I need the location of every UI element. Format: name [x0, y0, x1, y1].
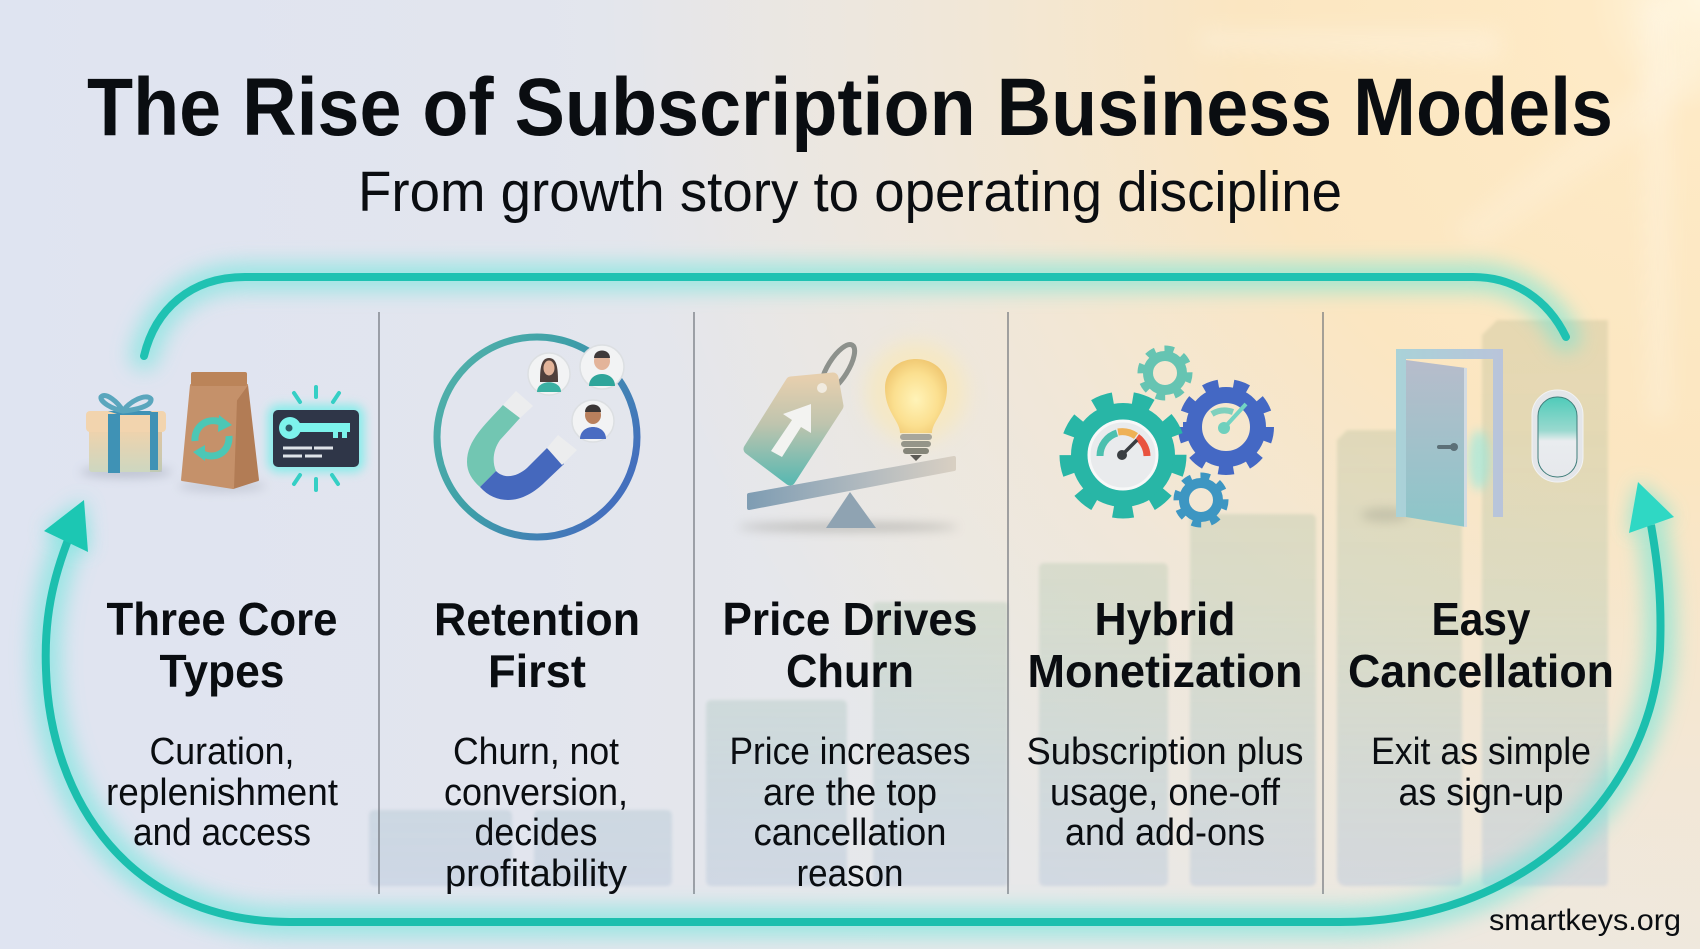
- text: price drives churn: cancellation: [754, 812, 946, 854]
- text: three core types: replenishment: [106, 772, 338, 814]
- icon: open door: [1361, 349, 1503, 527]
- heading: three core types: Types: [160, 645, 284, 697]
- icon: gift box: [80, 396, 172, 478]
- panel: price drives churn: [722, 340, 978, 895]
- source credit: smartkeys.org: [1489, 904, 1681, 937]
- text: retention first: [444, 731, 628, 895]
- text: easy cancellation: Exit as simple: [1371, 731, 1591, 773]
- text: retention first: Churn, not: [453, 731, 619, 773]
- text: hybrid monetization: [1026, 731, 1304, 854]
- panel: easy cancellation: [1348, 349, 1614, 814]
- text: price drives churn: are the top: [763, 772, 937, 814]
- heading: price drives churn: Price Drives: [722, 593, 978, 645]
- heading: easy cancellation: [1348, 593, 1614, 697]
- text: three core types: and access: [133, 812, 311, 854]
- panel: hybrid monetization: [1026, 349, 1304, 854]
- text: retention first: profitability: [445, 853, 627, 895]
- text: three core types: Curation,: [150, 731, 294, 773]
- icon: kraft bag with refill arrows: [178, 372, 266, 492]
- text: hybrid monetization: and add-ons: [1065, 812, 1265, 854]
- heading: hybrid monetization: Hybrid: [1094, 593, 1236, 645]
- column dividers: [379, 312, 1323, 894]
- text: retention first: conversion,: [444, 772, 628, 814]
- text: three core types: [106, 731, 338, 854]
- heading: price drives churn: Churn: [786, 645, 914, 697]
- heading: easy cancellation: Easy: [1432, 593, 1531, 645]
- heading: easy cancellation: Cancellation: [1348, 645, 1614, 697]
- background bar chart: [369, 320, 1608, 886]
- text: hybrid monetization: Subscription plus: [1026, 731, 1304, 773]
- icon: digital key card: [268, 387, 364, 490]
- arrow: bottom loop of the cycle with two arrowheads: [44, 482, 1674, 922]
- heading: three core types: [106, 593, 338, 697]
- heading: three core types: Three Core: [106, 593, 338, 645]
- heading: retention first: First: [488, 645, 586, 697]
- title: The Rise of Subscription Business Models: [87, 62, 1613, 153]
- icon: gears with gauge: [1066, 349, 1269, 524]
- heading: retention first: [434, 593, 640, 697]
- panel: retention first: [434, 337, 640, 895]
- icon: price tag and light bulb on a seesaw: [738, 340, 966, 531]
- icon: toggle switch: [1532, 390, 1583, 482]
- icon: magnet attracting customers: [437, 337, 637, 537]
- text: price drives churn: [730, 731, 970, 895]
- subtitle: From growth story to operating discipline: [358, 160, 1342, 224]
- text: price drives churn: reason: [796, 853, 904, 895]
- text: price drives churn: Price increases: [730, 731, 970, 773]
- text: hybrid monetization: usage, one-off: [1050, 772, 1280, 814]
- text: easy cancellation: as sign-up: [1398, 772, 1564, 814]
- heading: price drives churn: [722, 593, 978, 697]
- arrow: top arc of the cycle: [144, 277, 1566, 356]
- text: easy cancellation: [1371, 731, 1591, 814]
- text: retention first: decides: [474, 812, 598, 854]
- panel: three core types: [80, 372, 364, 854]
- heading: hybrid monetization: [1028, 593, 1302, 697]
- heading: hybrid monetization: Monetization: [1028, 645, 1302, 697]
- heading: retention first: Retention: [434, 593, 640, 645]
